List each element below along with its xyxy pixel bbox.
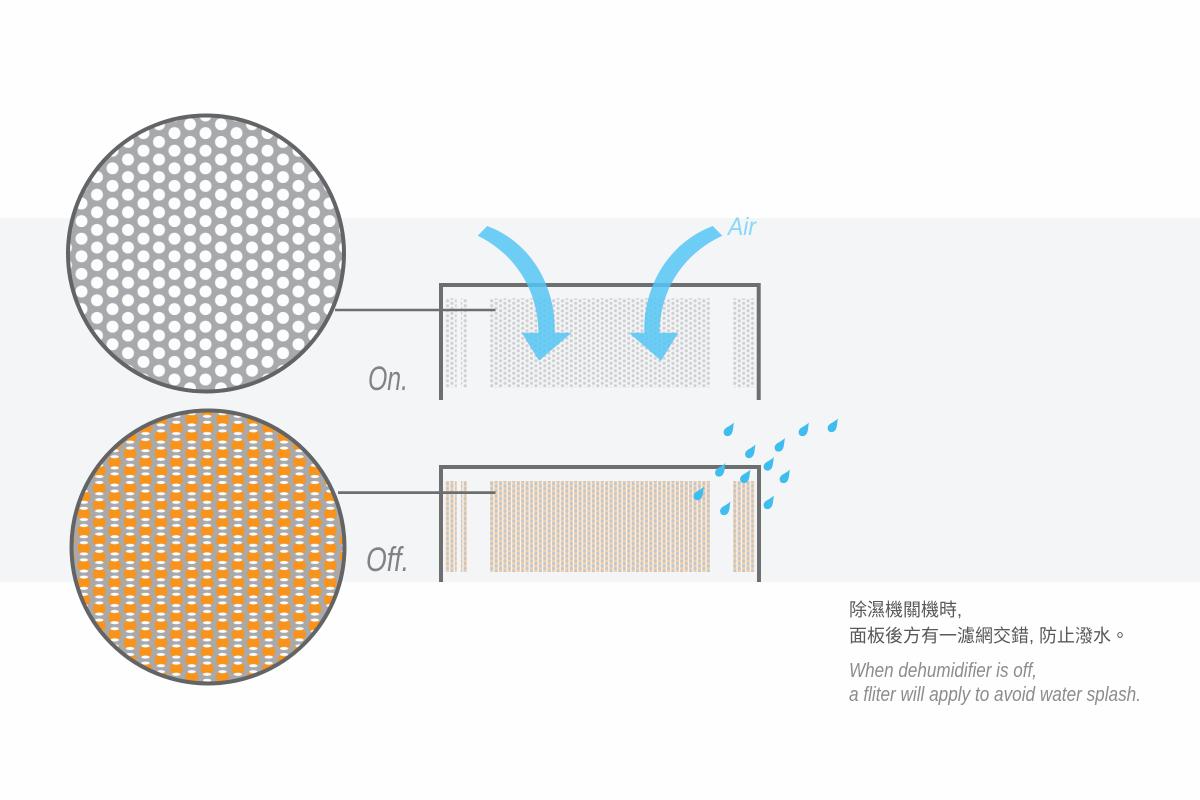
- device frame: off: [441, 467, 759, 582]
- connector line: on: [335, 309, 496, 311]
- magnified filter: on state: [66, 113, 346, 394]
- label: On: On.: [368, 360, 408, 398]
- device frame: on: [441, 285, 759, 400]
- text block: English description: a fliter will apply to avoid water splash.: [849, 684, 1141, 706]
- arrow: right airflow: [629, 226, 722, 361]
- label: Off: Off.: [366, 541, 409, 579]
- icon: water drops: [694, 418, 838, 515]
- text block: Chinese description: 面板後方有一濾網交錯, 防止潑水。: [849, 626, 1129, 646]
- arrow: left airflow: [478, 226, 572, 361]
- panel: on-state mesh: [445, 298, 755, 387]
- infographic: [0, 114, 1200, 705]
- text block: English description: When dehumidifier is off,: [849, 660, 1037, 682]
- label: Air: Air: [726, 213, 758, 241]
- text block: Chinese description: 除濕機關機時,: [849, 600, 962, 620]
- panel: off-state mesh: [445, 481, 755, 572]
- background band: [0, 218, 1200, 582]
- magnified filter: off state: [69, 408, 347, 686]
- connector line: off: [338, 491, 496, 494]
